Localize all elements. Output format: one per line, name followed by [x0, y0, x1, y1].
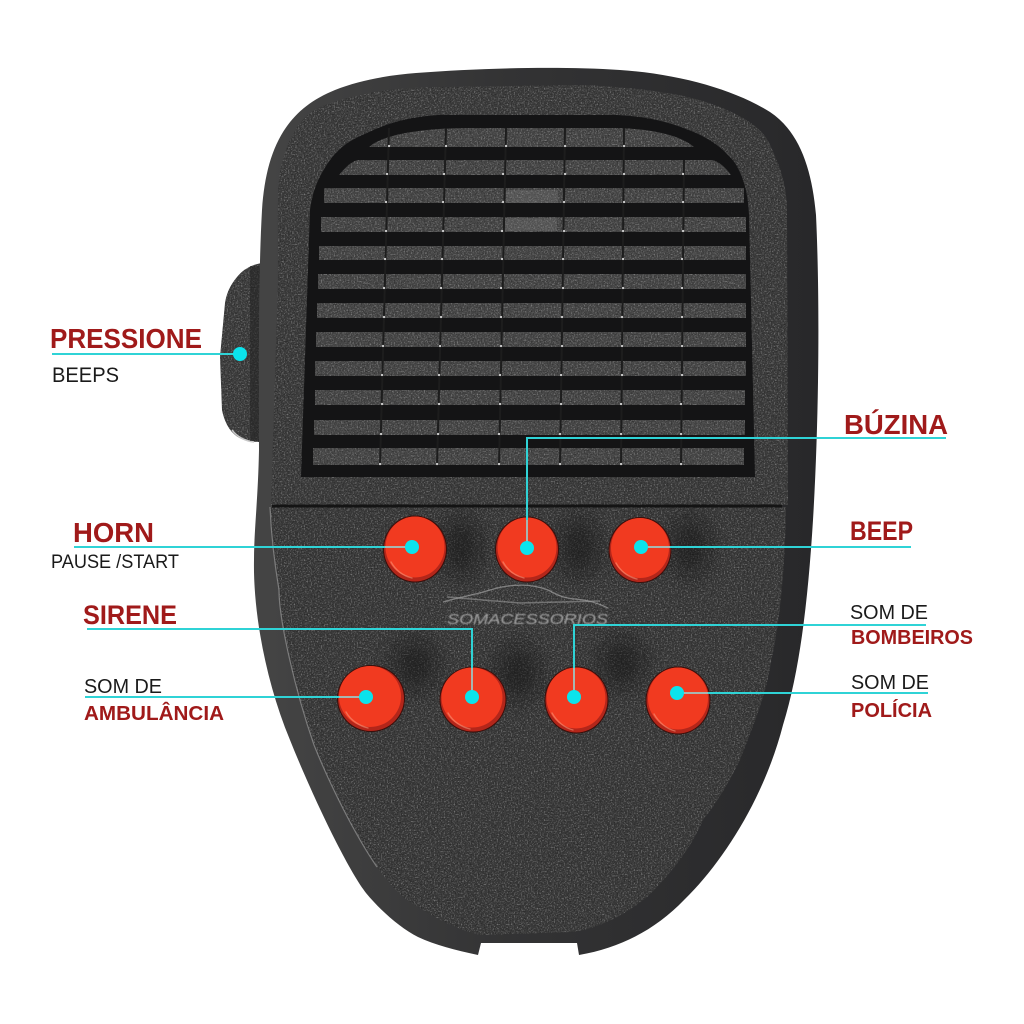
- button: policia: [646, 666, 710, 734]
- callout: som de ambulancia: [84, 676, 373, 725]
- button: buzina: [495, 516, 559, 582]
- callout: som de policia: POLÍCIA: [851, 699, 932, 722]
- callout: pressione beeps: PRESSIONE: [50, 323, 202, 354]
- callout: horn: [51, 517, 419, 573]
- device: side button: [220, 263, 264, 442]
- button: bombeiros: [544, 666, 608, 734]
- slot highlights: [380, 146, 683, 464]
- callout: buzina: BÚZINA: [844, 409, 948, 440]
- body outer rim: [254, 68, 818, 955]
- button: sirene: [440, 666, 506, 732]
- callout: beep: [634, 516, 913, 554]
- upper surround: [271, 85, 788, 505]
- bright bars: [505, 190, 558, 231]
- logo on device: [443, 585, 608, 628]
- callout: som de bombeiros: [567, 602, 973, 704]
- callout: som de policia: [670, 672, 932, 722]
- device: microphone body: [254, 68, 818, 955]
- panel edge highlight: [270, 507, 377, 867]
- callout: pressione beeps: [50, 323, 247, 387]
- button: beep: [608, 517, 672, 583]
- grille recess: [301, 115, 755, 477]
- callout: som de ambulancia: AMBULÂNCIA: [84, 701, 224, 725]
- bar slots: [380, 128, 684, 466]
- callout: som de bombeiros: BOMBEIROS: [851, 627, 973, 649]
- callout: pressione beeps: BEEPS: [52, 364, 119, 387]
- callout: beep: BEEP: [850, 516, 913, 546]
- callout: buzina: [520, 409, 948, 555]
- button shadows: [393, 517, 710, 701]
- divider line: [272, 504, 782, 508]
- buttons: top row: [383, 516, 672, 583]
- callout: som de ambulancia: SOM DE: [84, 676, 162, 698]
- buttons: bottom row: [337, 665, 710, 734]
- callout: som de bombeiros: SOM DE: [850, 602, 928, 624]
- grille bars: [313, 128, 746, 465]
- lower panel: [270, 507, 786, 935]
- logo on device: SOMACESSORIOS: [447, 611, 608, 628]
- button: ambulancia: [337, 665, 405, 732]
- button: horn: [383, 516, 447, 582]
- callout: sirene: SIRENE: [83, 600, 177, 630]
- callout: horn: HORN: [73, 517, 154, 548]
- callout: horn: PAUSE /START: [51, 552, 179, 573]
- speaker grille: [301, 115, 755, 477]
- callout: sirene: [83, 600, 479, 704]
- callout: som de policia: SOM DE: [851, 672, 929, 694]
